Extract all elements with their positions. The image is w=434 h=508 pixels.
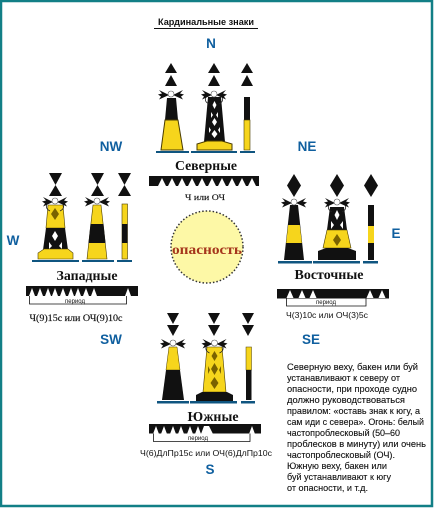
west topmarks xyxy=(49,173,131,196)
east topmarks xyxy=(287,174,378,197)
explanatory text: устанавливают к северу от xyxy=(287,373,401,384)
south marks xyxy=(140,313,273,458)
direction labels xyxy=(7,36,401,477)
east tower buoy xyxy=(313,198,360,264)
explanatory text: Северную веху, бакен или буй xyxy=(287,362,418,373)
direction labels: N xyxy=(206,36,216,51)
east spar buoy xyxy=(278,198,312,264)
east marks xyxy=(277,174,389,320)
north tower buoy xyxy=(191,90,237,153)
south topmarks xyxy=(167,313,254,336)
west spar buoy xyxy=(82,197,114,262)
south spar buoy xyxy=(157,339,189,404)
explanatory text: опасности, при проходе судно xyxy=(287,384,417,395)
west marks xyxy=(26,173,138,323)
west light rhythm xyxy=(26,286,138,305)
north pole xyxy=(240,97,255,153)
north spar buoy conical xyxy=(156,90,189,153)
east light rhythm xyxy=(277,289,389,306)
direction labels: NE xyxy=(298,139,316,154)
south light text: Ч(6)ДлПр15с или ОЧ(6)ДлПр10с xyxy=(140,448,273,458)
east heading: Восточные xyxy=(294,267,364,282)
direction labels: S xyxy=(205,462,215,477)
explanatory text: сам иди с севера». Огонь: белый xyxy=(287,417,424,428)
south pole xyxy=(241,347,255,404)
north heading: Северные xyxy=(175,159,237,174)
south light rhythm: период xyxy=(188,436,208,442)
explanatory text: правилом: «оставь знак к югу, а xyxy=(287,406,421,417)
west light text: Ч(9)15с или ОЧ(9)10с xyxy=(30,313,123,323)
west tower buoy xyxy=(32,197,79,262)
explanatory text: частопроблесковый (ОЧ). xyxy=(287,450,395,461)
south light rhythm xyxy=(149,424,261,442)
west pole xyxy=(117,204,132,262)
direction labels: SE xyxy=(302,332,320,347)
danger circle xyxy=(171,211,243,283)
danger circle: опасность xyxy=(172,242,242,257)
title: Кардинальные знаки xyxy=(158,17,254,27)
west heading: Западные xyxy=(56,268,118,283)
direction labels: E xyxy=(391,226,401,241)
explanatory text: Южную веху, бакен или xyxy=(287,461,387,472)
east pole xyxy=(363,205,378,264)
north topmarks xyxy=(165,63,253,86)
east light text: Ч(3)10с или ОЧ(3)5с xyxy=(286,310,369,320)
explanatory text: проблесков в минуту) или очень xyxy=(287,439,426,450)
explanatory text: от опасности, и т.д. xyxy=(287,483,368,494)
east light rhythm: период xyxy=(316,300,336,306)
explanatory text xyxy=(287,362,426,494)
south heading: Южные xyxy=(188,409,239,424)
south tower buoy xyxy=(190,339,237,404)
north marks xyxy=(149,63,259,202)
direction labels: NW xyxy=(100,139,122,154)
west light rhythm: период xyxy=(65,299,85,305)
direction labels: W xyxy=(7,233,20,248)
explanatory text: должно руководствоваться xyxy=(287,395,405,406)
north light text: Ч или ОЧ xyxy=(185,192,226,202)
direction labels: SW xyxy=(100,332,122,347)
explanatory text: буй устанавливают к югу xyxy=(287,472,391,483)
north light rhythm xyxy=(149,176,259,186)
explanatory text: частопроблесковый (50–60 xyxy=(287,428,400,439)
